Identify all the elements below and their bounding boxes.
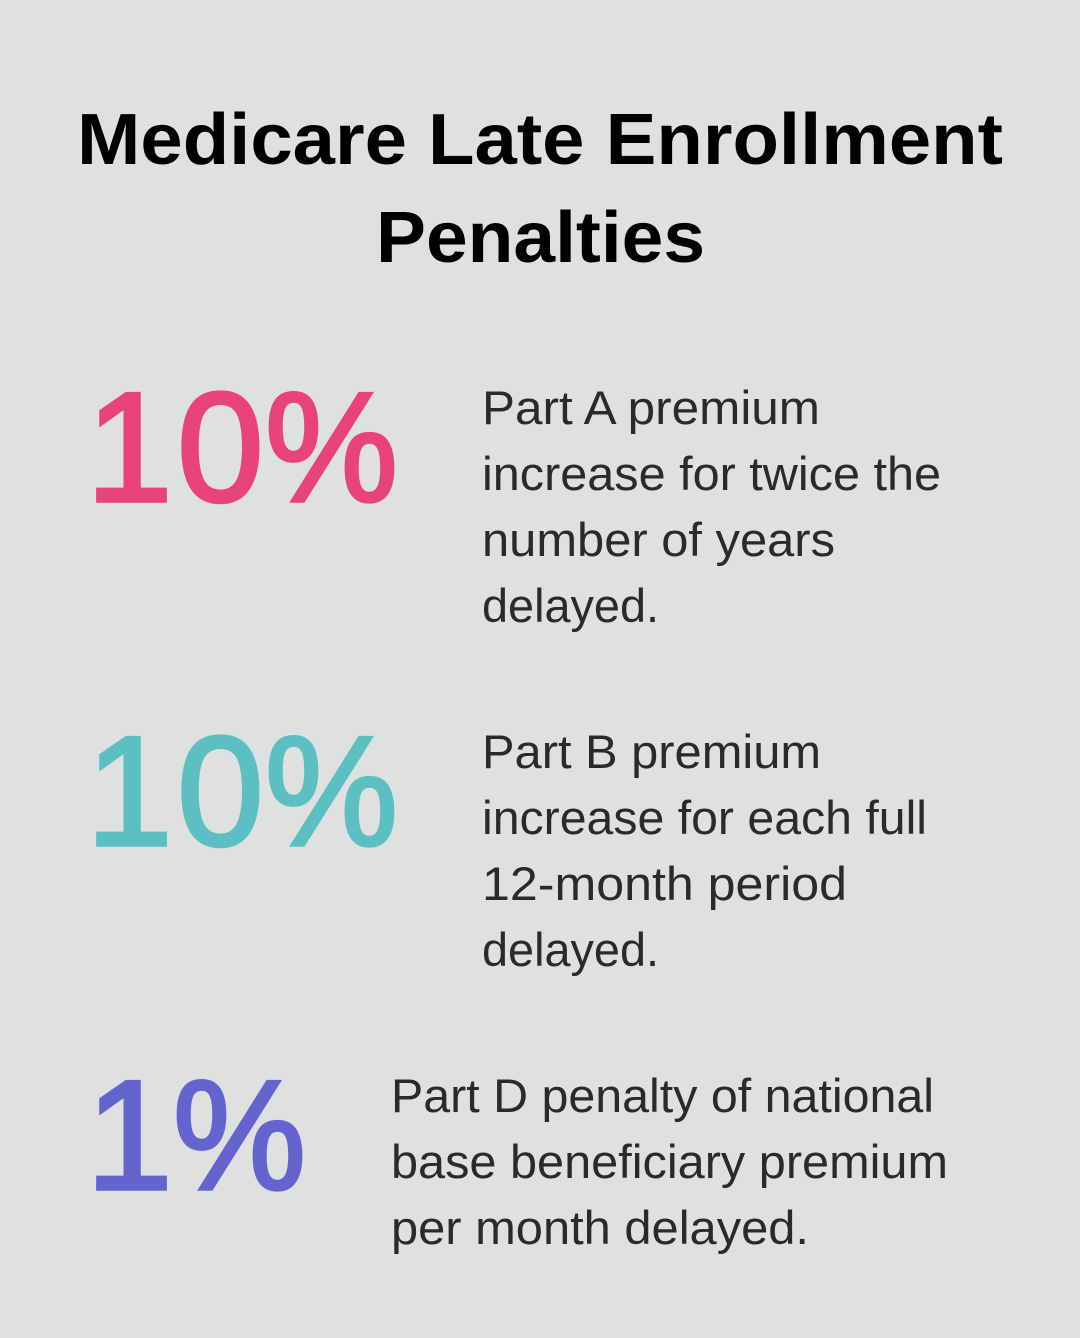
panel: Part D penalty [86, 1049, 948, 1254]
statistic: 10% Part A: 0 [177, 361, 264, 535]
panel: Part B penalty [86, 705, 927, 976]
text block: Part D description: base beneficiary premium [391, 1135, 948, 1188]
text block: Part A description: Part A premium [482, 381, 820, 434]
text block: Part D description: per month delayed. [391, 1201, 809, 1254]
text block: Part A description: number of years [482, 513, 835, 566]
statistic: 10% Part B: 1 [86, 705, 173, 879]
statistic: 1% Part D: 1 [86, 1049, 173, 1223]
text block: Part B description: increase for each full [482, 791, 927, 844]
statistic: 10% Part A: % [265, 361, 398, 535]
text block: Part B description: 12-month period [482, 857, 847, 910]
text block: Part B description: delayed. [482, 923, 659, 976]
statistic: 10% Part A: 1 [86, 361, 173, 535]
text block: Part D description: Part D penalty of national [391, 1069, 934, 1122]
text block: Part A description: delayed. [482, 579, 659, 632]
statistic: 10% Part B: 0 [177, 705, 264, 879]
title: Penalties [376, 198, 705, 278]
text block: Part D description [391, 1069, 948, 1254]
text block: Part A description: increase for twice the [482, 447, 941, 500]
text block: Part B description [482, 725, 927, 976]
statistic: 10% Part B: % [265, 705, 398, 879]
title: Medicare Late Enrollment [77, 100, 1003, 180]
text block: Part A description [482, 381, 941, 632]
title [77, 100, 1003, 278]
statistic: 1% Part D: % [173, 1049, 306, 1223]
panel: Part A penalty [86, 361, 941, 632]
text block: Part B description: Part B premium [482, 725, 821, 778]
